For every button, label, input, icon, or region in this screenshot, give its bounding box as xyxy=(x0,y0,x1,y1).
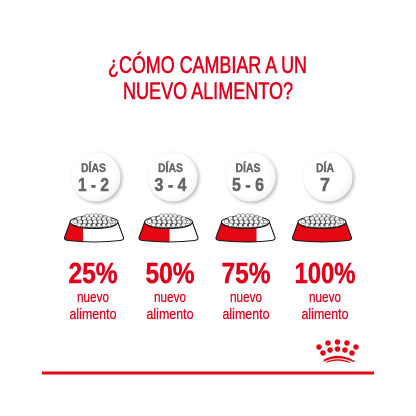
bowl 100 percent xyxy=(292,214,352,242)
day badge 1 xyxy=(72,152,120,202)
day badge 4 xyxy=(304,152,352,202)
label 4: alimento xyxy=(302,306,348,323)
label 1: nuevo xyxy=(77,289,109,306)
day badge 3: 5 - 6 xyxy=(232,175,264,195)
label 4 xyxy=(302,289,348,323)
percent 50: 50% xyxy=(146,258,195,290)
bowl 50 percent xyxy=(138,214,199,242)
label 2: alimento xyxy=(146,306,194,323)
day badge 3 xyxy=(226,152,276,202)
label 3 xyxy=(222,289,270,323)
day badge 4: DÍA xyxy=(316,162,334,175)
day badge 1: DÍAS xyxy=(81,162,106,175)
step 4: day 7 xyxy=(292,152,356,323)
day badge 1: 1 - 2 xyxy=(78,175,109,195)
logo: crown xyxy=(316,339,359,363)
label 1 xyxy=(70,289,116,323)
label 3: alimento xyxy=(222,306,270,323)
label 2 xyxy=(146,289,194,323)
day badge 2 xyxy=(148,152,198,202)
step 1: days 1-2 xyxy=(62,152,124,323)
bowl 25 percent xyxy=(64,214,124,242)
label 4: nuevo xyxy=(309,289,341,306)
day badge 3: DÍAS xyxy=(236,162,261,175)
day badge 2: 3 - 4 xyxy=(154,175,186,195)
percent 25: 25% xyxy=(68,258,118,290)
label 2: nuevo xyxy=(154,289,186,306)
bowl 75 percent xyxy=(215,214,276,242)
title: ¿CÓMO CAMBIAR A UN xyxy=(108,52,307,79)
step 3: days 5-6 xyxy=(214,152,276,323)
day badge 2: DÍAS xyxy=(158,162,183,175)
label 3: nuevo xyxy=(230,289,262,306)
title xyxy=(108,52,307,105)
title: NUEVO ALIMENTO? xyxy=(123,78,293,105)
day badge 4: 7 xyxy=(320,175,330,195)
percent 75: 75% xyxy=(222,258,271,290)
percent 100: 100% xyxy=(294,258,356,290)
bottom rule xyxy=(42,372,374,374)
label 1: alimento xyxy=(70,306,116,323)
step 2: days 3-4 xyxy=(136,152,198,323)
